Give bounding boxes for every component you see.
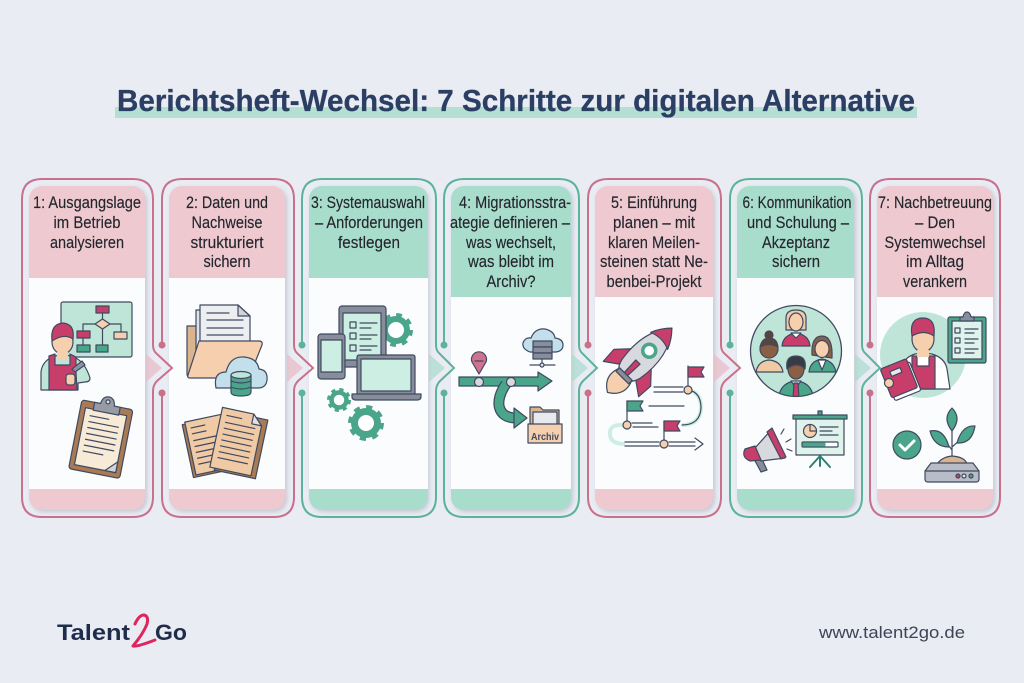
arrow: connector 1 to 2 <box>146 342 166 396</box>
icon: presentation board <box>793 411 847 467</box>
heading: step 4: was wechselt, <box>465 233 556 252</box>
icon: migration path <box>459 329 563 443</box>
heading: step 6: 6: Kommunikation <box>742 193 852 212</box>
heading: step 7: Systemwechsel <box>884 233 986 252</box>
panel: step 5 <box>589 186 715 512</box>
heading: step 5 <box>600 193 708 291</box>
heading: step 2: Nachweise <box>192 213 262 232</box>
arrow: connector 5 to 6 <box>714 342 734 396</box>
heading: step 2: strukturiert <box>190 233 264 252</box>
arrow: connector 4 to 5 <box>572 342 592 396</box>
heading: step 6: Akzeptanz <box>762 233 830 252</box>
logo: Talent <box>57 620 131 645</box>
icon: megaphone <box>744 428 792 472</box>
heading: step 7 <box>878 193 992 291</box>
heading: step 4: was bleibt im <box>467 252 554 271</box>
title: Berichtsheft-Wechsel: 7 Schritte zur digitalen Alternative <box>117 83 915 118</box>
heading: step 6 <box>742 193 852 271</box>
website url: www.talent2go.de <box>818 623 965 642</box>
panel: step 7 <box>877 186 995 512</box>
heading: step 1: 1: Ausgangslage <box>33 193 141 212</box>
outline: step 6 <box>730 179 880 517</box>
outline: step 2 <box>162 179 313 517</box>
icon: clipboard <box>69 392 135 478</box>
heading: step 3: – Anforderungen <box>315 213 423 232</box>
logo <box>57 615 187 646</box>
panel: step 1 <box>29 186 147 512</box>
icon: plant on device <box>925 408 979 482</box>
heading: step 3: 3: Systemauswahl <box>311 193 425 212</box>
heading: step 4 <box>450 193 571 291</box>
heading: step 3: festlegen <box>338 233 400 252</box>
heading: step 4: Archiv? <box>486 272 536 291</box>
icon: migration path: Archiv <box>531 431 559 443</box>
heading: step 7: verankern <box>903 272 967 291</box>
heading: step 5: steinen statt Ne- <box>600 252 708 271</box>
icon: check mark <box>893 431 921 459</box>
arrow: connector 6 to 7 <box>855 342 874 396</box>
icon: folder with documents and cloud <box>187 305 267 396</box>
icon: team circle <box>750 306 842 400</box>
icon: rocket <box>589 310 690 411</box>
heading: step 7: – Den <box>915 213 955 232</box>
heading: step 2: 2: Daten und <box>186 193 268 212</box>
heading: step 4: 4: Migrationsstra- <box>459 193 571 212</box>
outline: step 1 <box>22 179 172 517</box>
icon: worker with book and checklist <box>880 312 986 402</box>
heading: step 5: 5: Einführung <box>611 193 697 212</box>
heading: step 6: und Schulung – <box>747 213 849 232</box>
heading: step 5: planen – mit <box>613 213 695 232</box>
panel: step 4 <box>450 186 573 512</box>
outline: step 4 <box>444 179 597 517</box>
outline: step 7 <box>870 179 1000 517</box>
heading: step 4: ategie definieren – <box>450 213 570 232</box>
heading: step 3 <box>311 193 425 252</box>
heading: step 7: im Alltag <box>906 252 964 271</box>
outline: step 5 <box>588 179 740 517</box>
heading: step 1: im Betrieb <box>54 213 120 232</box>
heading: step 7: 7: Nachbetreuung <box>878 193 992 212</box>
heading: step 1: analysieren <box>50 233 124 252</box>
logo: Go <box>155 620 187 645</box>
icon: devices and gears <box>318 306 421 438</box>
heading: step 1 <box>33 193 141 252</box>
panel: step 3 <box>309 186 429 512</box>
heading: step 2 <box>186 193 268 271</box>
panel: step 2 <box>169 186 287 512</box>
icon: milestone road <box>610 366 704 450</box>
outline: step 3 <box>302 179 454 517</box>
panel: step 6 <box>737 186 856 512</box>
heading: step 5: benbei-Projekt <box>606 272 702 291</box>
heading: step 2: sichern <box>204 252 250 271</box>
icon: paper stack <box>182 407 269 479</box>
heading: step 6: sichern <box>772 252 820 271</box>
heading: step 5: klaren Meilen- <box>608 233 700 252</box>
arrow: connector 3 to 4 <box>429 342 448 396</box>
arrow: connector 2 to 3 <box>287 342 306 396</box>
icon: flowchart board with worker <box>41 302 132 390</box>
